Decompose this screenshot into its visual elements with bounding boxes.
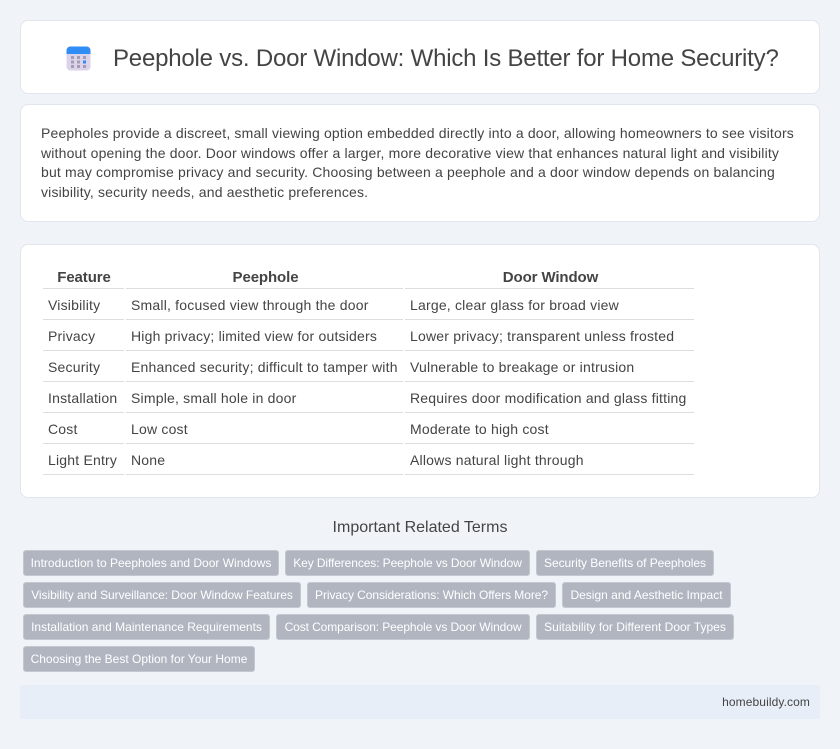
row: security: Security bbox=[48, 359, 100, 375]
tag: Cost Comparison: Peephole vs Door Window bbox=[285, 620, 521, 634]
row: privacy: Lower privacy; transparent unless frosted bbox=[410, 328, 674, 344]
header row bbox=[57, 269, 598, 286]
row: cost: Moderate to high cost bbox=[410, 421, 549, 437]
tag bbox=[23, 550, 279, 576]
intro text: but may compromise privacy and security. Choosing between a peephole and a door window depends on balancing bbox=[41, 164, 775, 180]
tag: Introduction to Peepholes and Door Windows bbox=[31, 556, 271, 570]
row: visibility: Large, clear glass for broad view bbox=[410, 297, 619, 313]
tag: Installation and Maintenance Requirements bbox=[31, 620, 262, 634]
row: privacy: High privacy; limited view for outsiders bbox=[131, 328, 377, 344]
row: light entry: None bbox=[131, 452, 165, 468]
row: privacy bbox=[48, 328, 674, 344]
row: cost bbox=[48, 421, 549, 437]
intro text: without opening the door. Door windows offer a larger, more decorative view that enhances natural light and visibility bbox=[41, 145, 779, 161]
row: installation bbox=[48, 390, 687, 406]
tag bbox=[23, 614, 270, 640]
row: installation: Installation bbox=[48, 390, 117, 406]
header row: Feature bbox=[57, 269, 111, 286]
related terms heading: Important Related Terms bbox=[333, 519, 507, 536]
row: visibility: Visibility bbox=[48, 297, 100, 313]
tag: Choosing the Best Option for Your Home bbox=[31, 652, 247, 666]
header card bbox=[20, 20, 820, 94]
row: light entry: Light Entry bbox=[48, 452, 117, 468]
row: visibility: Small, focused view through the door bbox=[131, 297, 369, 313]
header row: Door Window bbox=[503, 269, 598, 286]
tag bbox=[285, 550, 530, 576]
tag bbox=[276, 614, 530, 640]
related term tags bbox=[23, 550, 734, 672]
tag: Security Benefits of Peepholes bbox=[544, 556, 706, 570]
row: security: Enhanced security; difficult to tamper with bbox=[131, 359, 398, 375]
tag bbox=[307, 582, 556, 608]
table card bbox=[20, 244, 820, 498]
tag: Key Differences: Peephole vs Door Window bbox=[293, 556, 522, 570]
tag bbox=[23, 646, 255, 672]
row: security: Vulnerable to breakage or intrusion bbox=[410, 359, 634, 375]
row: visibility bbox=[48, 297, 619, 313]
header row: Peephole bbox=[233, 269, 298, 286]
tag: Privacy Considerations: Which Offers More? bbox=[315, 588, 548, 602]
footer brand: homebuildy.com bbox=[722, 695, 810, 709]
footer bar bbox=[20, 685, 820, 719]
row: privacy: Privacy bbox=[48, 328, 95, 344]
tag: Design and Aesthetic Impact bbox=[570, 588, 723, 602]
intro text bbox=[41, 125, 794, 200]
intro text: visibility, security needs, and aesthetic preferences. bbox=[41, 184, 368, 200]
row: installation: Requires door modification and glass fitting bbox=[410, 390, 687, 406]
row: cost: Cost bbox=[48, 421, 78, 437]
intro card bbox=[20, 104, 820, 222]
comparison table bbox=[43, 269, 694, 475]
tag bbox=[23, 582, 301, 608]
row: cost: Low cost bbox=[131, 421, 188, 437]
row: light entry: Allows natural light through bbox=[410, 452, 584, 468]
icon: calendar bbox=[66, 46, 90, 70]
row: light entry bbox=[48, 452, 584, 468]
tag bbox=[536, 550, 714, 576]
tag bbox=[536, 614, 734, 640]
tag: Suitability for Different Door Types bbox=[544, 620, 726, 634]
row: security bbox=[48, 359, 634, 375]
row: installation: Simple, small hole in door bbox=[131, 390, 296, 406]
tag bbox=[562, 582, 731, 608]
tag: Visibility and Surveillance: Door Window Features bbox=[31, 588, 293, 602]
title: Peephole vs. Door Window: Which Is Better for Home Security? bbox=[113, 45, 779, 72]
intro text: Peepholes provide a discreet, small viewing option embedded directly into a door, allowing homeowners to see visitors bbox=[41, 125, 794, 141]
